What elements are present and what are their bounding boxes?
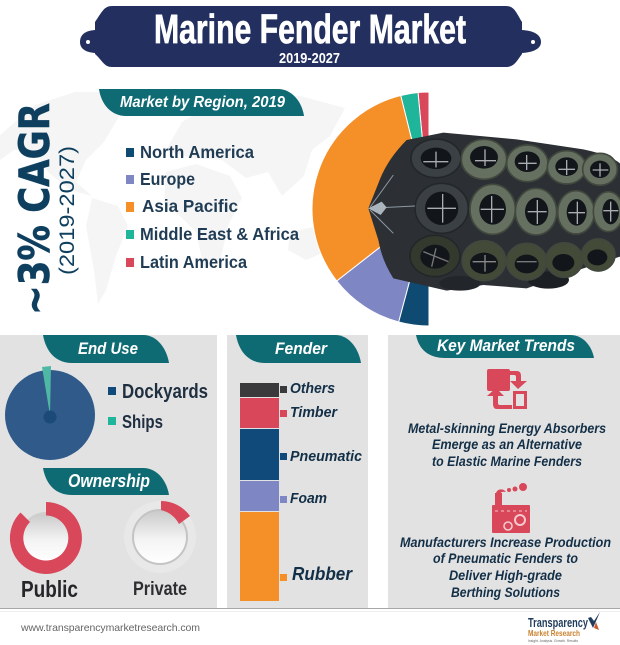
- heading: end use: [43, 335, 169, 363]
- CAGR callout: [10, 103, 79, 315]
- panel: key market trends: [388, 335, 620, 608]
- trend text 2: Berthing Solutions: [451, 584, 560, 600]
- heading: ownership: Ownership: [68, 471, 150, 491]
- logo: Transparency Market Research: Insight. Analysis. Growth. Results: [528, 638, 578, 643]
- trend text 2: of Pneumatic Fenders to: [433, 550, 578, 566]
- heading: fender: Fender: [275, 339, 328, 358]
- CAGR value: ~3% CAGR: [10, 103, 59, 315]
- logo: Transparency Market Research: Market Research: [528, 628, 580, 638]
- banner body: [95, 6, 522, 67]
- legend: regions: Europe: [140, 169, 195, 189]
- legend: regions: [126, 142, 299, 272]
- donut: public: [10, 502, 82, 574]
- CAGR period: (2019-2027): [56, 146, 79, 275]
- slice: North America: [399, 209, 429, 326]
- pie chart: end use: [5, 366, 95, 460]
- legend: regions: Middle East & Africa: [140, 224, 299, 244]
- trend text 1: Emerge as an Alternative: [432, 436, 582, 452]
- legend: end use: Ships: [122, 412, 163, 432]
- legend: fender: Foam: [290, 490, 327, 507]
- trend text 2: [400, 534, 611, 600]
- trend text 2: Deliver High-grade: [449, 567, 562, 583]
- legend: fender: [280, 380, 363, 584]
- legend: regions: Latin America: [140, 252, 247, 272]
- subtitle years: 2019-2027: [279, 50, 340, 67]
- world map background: [0, 92, 345, 304]
- panel: end use and ownership: [0, 335, 217, 608]
- semi-pie chart: market by region: [312, 92, 429, 326]
- banner end lug left: [80, 30, 97, 53]
- footer url: www.transparencymarketresearch.com: [20, 622, 200, 634]
- heading: fender: [236, 335, 361, 363]
- banner end lug right: [520, 30, 541, 53]
- slice: Asia Pacific: [312, 96, 429, 281]
- legend: regions: North America: [140, 142, 254, 162]
- logo: Transparency Market Research: Transparency: [528, 616, 588, 630]
- legend: fender: Pneumatic: [290, 448, 363, 465]
- heading: key market trends: Key Market Trends: [437, 336, 575, 355]
- icon: factory: [492, 483, 530, 533]
- legend: fender: Others: [290, 380, 335, 397]
- trend text 1: to Elastic Marine Fenders: [432, 453, 582, 469]
- title: Marine Fender Market: [154, 6, 466, 52]
- label: private: Private: [133, 579, 187, 600]
- heading: end use: End Use: [78, 339, 138, 358]
- heading: ownership: [43, 468, 169, 495]
- panel: fender: [227, 335, 368, 608]
- image: marine fender: [368, 133, 620, 291]
- logo: Transparency Market Research: [528, 612, 600, 643]
- legend: fender: Timber: [290, 404, 338, 421]
- trend text 1: [408, 420, 606, 469]
- legend: end use: Dockyards: [122, 381, 208, 403]
- slice: Middle East and Africa: [401, 92, 429, 209]
- heading: market by region: [99, 89, 304, 116]
- legend: fender: Rubber: [292, 564, 353, 584]
- stacked bar chart: fender: [240, 383, 279, 601]
- donut: private: [124, 501, 196, 573]
- slice: Latin America: [418, 92, 429, 209]
- slice: Europe: [337, 209, 429, 322]
- title banner: [80, 6, 541, 67]
- heading: market by region: Market by Region, 2019: [120, 94, 285, 111]
- legend: regions: Asia Pacific: [142, 196, 238, 216]
- label: public: Public: [21, 576, 78, 602]
- legend: end use: [108, 381, 208, 432]
- icon: swap arrows: [487, 369, 527, 409]
